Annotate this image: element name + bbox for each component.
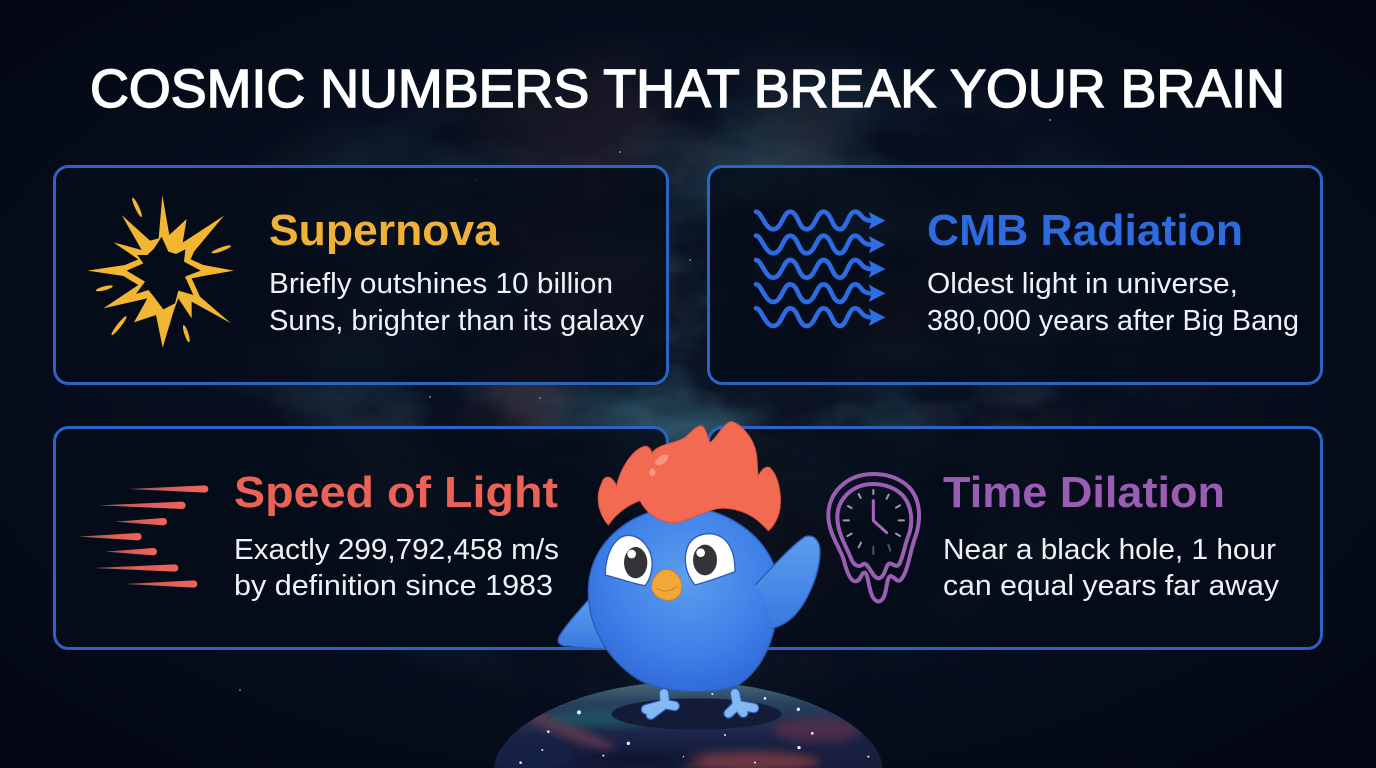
panel: supernova (54, 166, 668, 384)
background: deep space with nebula (212, 46, 1203, 693)
right wing (755, 536, 820, 628)
mascot on planet (490, 422, 883, 768)
text: supernova description: Suns, brighter than its galaxy (269, 305, 645, 337)
hair (598, 422, 780, 531)
beak (652, 569, 682, 600)
icon: melting clock (828, 474, 919, 602)
left eye (605, 535, 652, 586)
right wing edge (755, 536, 820, 628)
icon: supernova burst (87, 195, 234, 348)
text: CMB description: 380,000 years after Big Bang (927, 305, 1299, 337)
text: time dilation description: Near a black hole, 1 hour (943, 534, 1276, 566)
right eye (685, 534, 735, 585)
hair highlight (649, 453, 670, 476)
planet (490, 680, 883, 768)
beak line (657, 587, 677, 591)
feet (646, 693, 754, 715)
left wing (558, 600, 613, 649)
text: CMB description: Oldest light in universe, (927, 268, 1238, 300)
text: supernova description (269, 268, 645, 337)
title: COSMIC NUMBERS THAT BREAK YOUR BRAIN (90, 59, 1285, 119)
icon: radiation waves (756, 212, 885, 326)
text: speed of light description: Exactly 299,792,458 m/s (234, 534, 559, 566)
text: speed of light description: by definition since 1983 (234, 570, 553, 602)
body (588, 507, 778, 692)
icon: speed streaks (78, 485, 208, 588)
panel: speed of light (54, 428, 668, 648)
text: time dilation description (943, 534, 1280, 602)
heading: Speed of Light: Speed of Light (234, 468, 558, 517)
text: CMB description (927, 268, 1299, 337)
panel: CMB radiation (708, 166, 1322, 384)
heading: Supernova: Supernova (269, 206, 500, 255)
text: speed of light description (234, 534, 559, 602)
heading: CMB Radiation: CMB Radiation (927, 206, 1243, 255)
heading: Time Dilation: Time Dilation (943, 468, 1225, 517)
pupils (624, 545, 717, 578)
panel: time dilation (708, 428, 1322, 648)
shadow under mascot (612, 698, 782, 730)
text: supernova description: Briefly outshines 10 billion (269, 268, 613, 300)
text: time dilation description: can equal years far away (943, 570, 1280, 602)
